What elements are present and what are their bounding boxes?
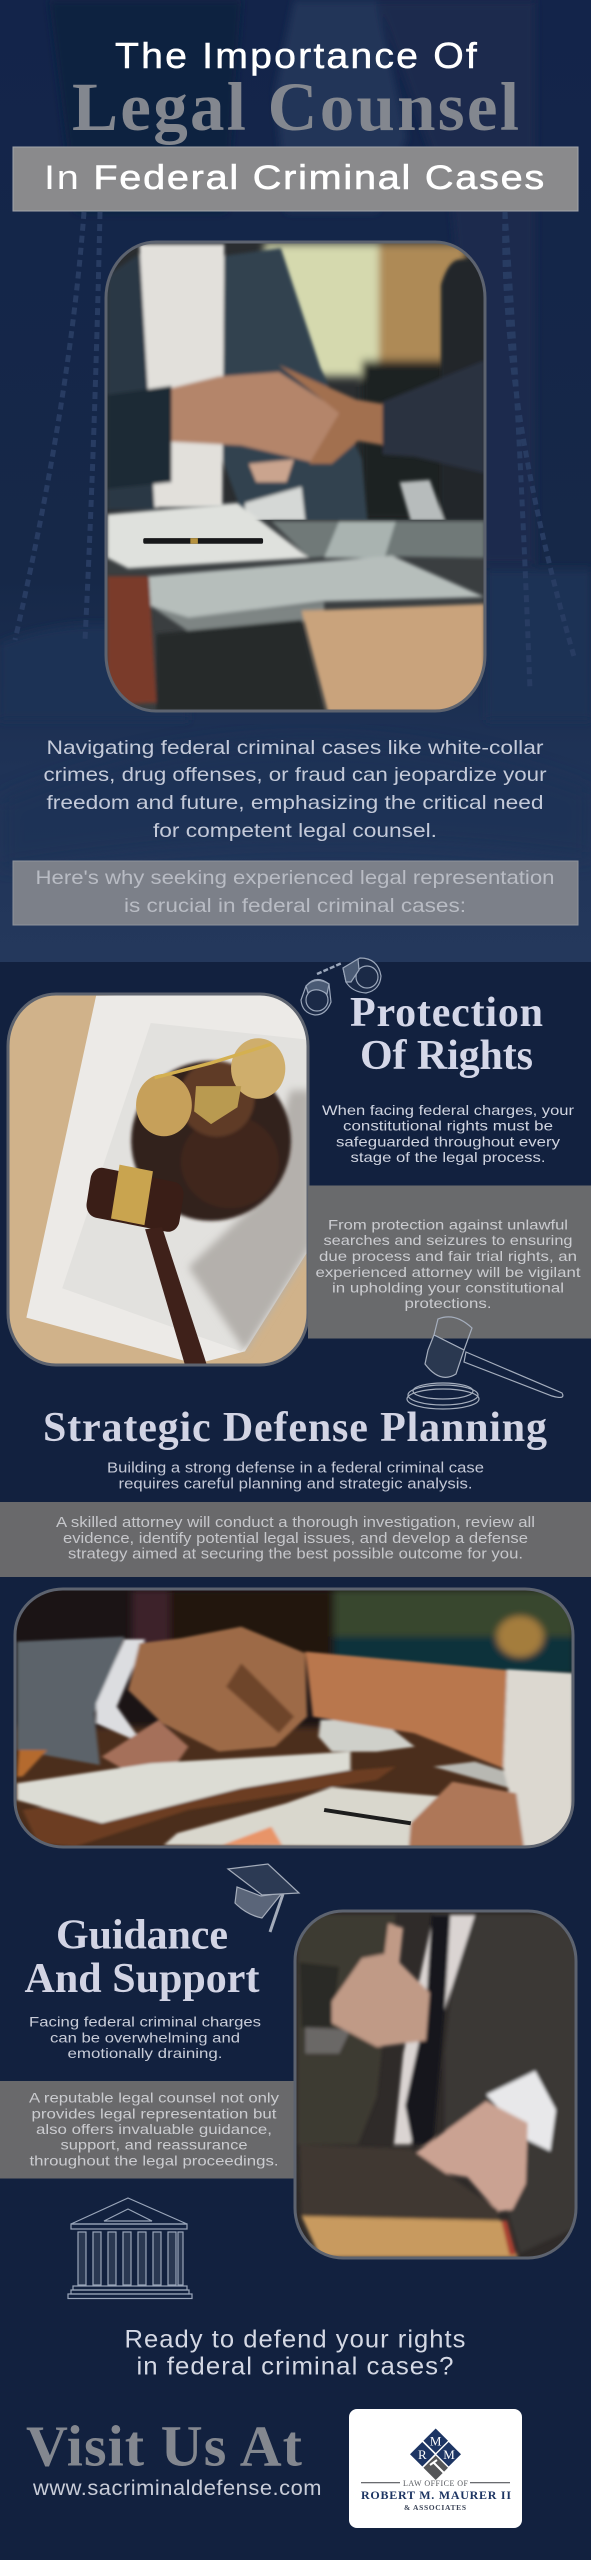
visit us block — [26, 2414, 322, 2500]
section: strategic defense planning — [0, 1405, 591, 1850]
grey detail band: evidence, identify potential legal issues, and develop a defense — [63, 1531, 528, 1547]
icon: handcuffs — [301, 958, 381, 1015]
lead text: constitutional rights must be — [343, 1118, 553, 1134]
logo mark: R — [418, 2447, 427, 2462]
intro paragraph: Navigating federal criminal cases like white-collar — [46, 737, 544, 759]
heading — [350, 990, 543, 1079]
icon: gavel — [407, 1317, 563, 1409]
grey detail band: experienced attorney will be vigilant — [316, 1264, 581, 1280]
header background: lady justice photo overlay — [0, 0, 591, 962]
heading: Of Rights — [360, 1033, 533, 1079]
intro paragraph: for competent legal counsel. — [153, 820, 437, 842]
logo card — [349, 2409, 522, 2528]
firm name — [361, 2479, 511, 2512]
heading: Guidance — [56, 1912, 228, 1958]
section: protection of rights — [6, 958, 591, 1409]
visit heading: Visit Us At — [26, 2414, 303, 2478]
grey detail band: From protection against unlawful — [328, 1216, 568, 1232]
lead text — [107, 1460, 484, 1492]
photo: gavel and scales on book — [6, 991, 311, 1368]
lead text: safeguarded throughout every — [336, 1134, 560, 1150]
lead text: can be overwhelming and — [50, 2030, 240, 2046]
grey detail band: support, and reassurance — [60, 2136, 248, 2152]
lead text: Facing federal criminal charges — [29, 2014, 261, 2030]
intro paragraph: crimes, drug offenses, or fraud can jeopardize your — [44, 764, 547, 786]
grey detail band: throughout the legal proceedings. — [30, 2152, 278, 2168]
heading: And Support — [24, 1956, 260, 2002]
grey detail band — [0, 1502, 591, 1577]
lead-in box — [13, 861, 578, 925]
intro paragraph — [44, 737, 547, 842]
icon: graduation cap — [228, 1864, 299, 1932]
call to action: Ready to defend your rights — [124, 2326, 466, 2354]
heading: Strategic Defense Planning — [43, 1405, 547, 1451]
lead text: Building a strong defense in a federal criminal case — [107, 1460, 484, 1476]
photo: attorney thumbs up with book — [292, 1908, 580, 2264]
lead text: emotionally draining. — [68, 2045, 222, 2061]
logo mark: M — [443, 2447, 455, 2462]
firm name: ROBERT M. MAURER II — [361, 2488, 511, 2502]
grey detail band: in upholding your constitutional — [332, 1280, 564, 1296]
lead-in box: Here's why seeking experienced legal representation — [36, 867, 554, 889]
icon: courthouse — [68, 2198, 192, 2298]
title banner: In Federal Criminal Cases — [44, 159, 546, 197]
grey detail band: provides legal representation but — [32, 2106, 277, 2122]
firm name: LAW OFFICE OF — [403, 2479, 469, 2488]
grey detail band: also offers invaluable guidance, — [36, 2121, 272, 2137]
lead text: requires careful planning and strategic analysis. — [118, 1476, 472, 1492]
lead text — [29, 2014, 261, 2061]
grey detail band — [0, 2081, 295, 2178]
heading — [24, 1912, 260, 2002]
grey detail band: A skilled attorney will conduct a thorough investigation, review all — [56, 1515, 535, 1531]
photo: handshake at table — [11, 1587, 577, 1850]
grey detail band — [308, 1186, 591, 1338]
logo mark: M — [430, 2434, 442, 2448]
lead text — [322, 1102, 574, 1165]
section divider: dark lower background — [0, 962, 591, 2560]
heading: Protection — [350, 990, 543, 1036]
logo mark — [410, 2428, 461, 2480]
grey detail band: strategy aimed at securing the best possible outcome for you. — [68, 1546, 523, 1562]
website url: www.sacriminaldefense.com — [32, 2477, 322, 2500]
lead-in box: is crucial in federal criminal cases: — [124, 895, 466, 917]
firm name: & ASSOCIATES — [404, 2503, 466, 2512]
grey detail band: A reputable legal counsel not only — [29, 2090, 279, 2106]
lead text: When facing federal charges, your — [322, 1102, 574, 1118]
title line 2: Legal Counsel — [72, 69, 519, 145]
lead text: stage of the legal process. — [350, 1149, 546, 1165]
title banner — [13, 147, 578, 211]
grey detail band: searches and seizures to ensuring — [324, 1232, 572, 1248]
intro paragraph: freedom and future, emphasizing the critical need — [46, 792, 544, 814]
section: guidance and support — [0, 1864, 580, 2298]
title — [13, 35, 578, 211]
title line 1: The Importance Of — [115, 35, 479, 76]
call to action: in federal criminal cases? — [136, 2352, 454, 2380]
call to action — [124, 2326, 466, 2380]
grey detail band: protections. — [404, 1295, 492, 1311]
photo: handshake over documents — [102, 239, 490, 716]
grey detail band: due process and fair trial rights, an — [319, 1248, 577, 1264]
